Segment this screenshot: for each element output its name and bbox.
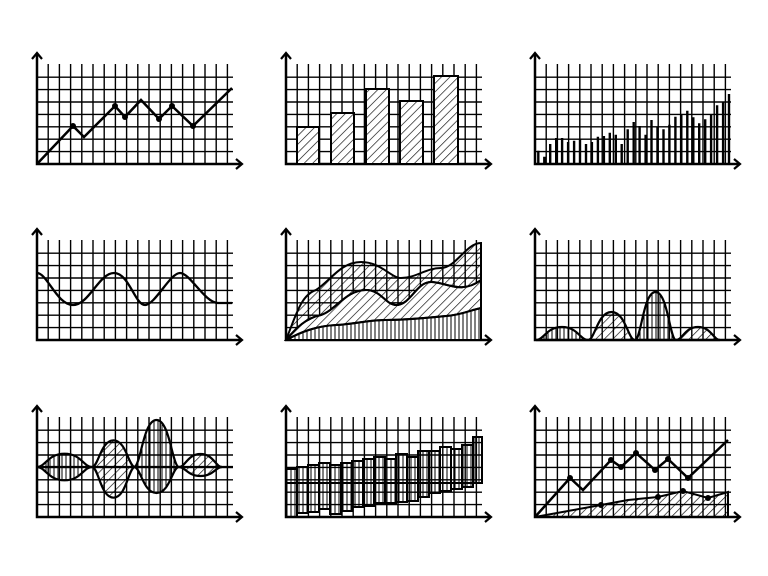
chart: thin bar chart	[530, 53, 740, 169]
chart: symmetric waves	[32, 406, 242, 522]
chart: line with markers	[32, 53, 242, 169]
chart: candle boxes	[281, 406, 491, 522]
chart: sine wave	[32, 229, 242, 345]
chart: hatched bar chart	[281, 53, 491, 169]
chart: stacked area	[281, 229, 491, 345]
chart: line with area	[530, 406, 740, 522]
chart: bell humps	[530, 229, 740, 345]
